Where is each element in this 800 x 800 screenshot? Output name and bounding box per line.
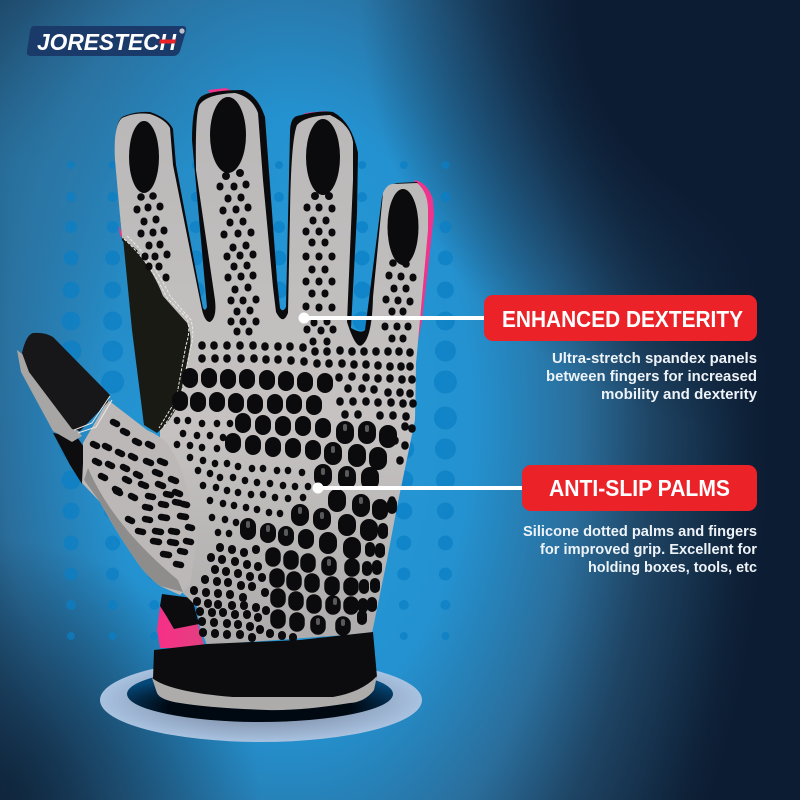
callout: anti-slip palms [522, 465, 757, 576]
cuff trim [152, 676, 377, 710]
thumb black underlay [53, 433, 88, 484]
black cuff gusset [160, 594, 199, 629]
thumb [17, 333, 197, 595]
halftone dot pattern [71, 165, 460, 636]
pink side panel [404, 180, 434, 362]
callout line: enhanced dexterity [298, 312, 486, 324]
thumb stitching [74, 396, 112, 433]
thumb dots [93, 422, 192, 565]
silver palm and fingers [115, 93, 428, 645]
callout line: anti-slip palms [312, 482, 524, 494]
pink cuff panel [157, 606, 205, 648]
glove [17, 88, 434, 710]
leather stitching [124, 236, 193, 428]
heading badge: ANTI-SLIP PALMS [549, 475, 730, 501]
description: Ultra-stretch spandex panels [552, 351, 757, 367]
pink fingertip trims [119, 88, 326, 238]
palm large dots [180, 376, 380, 541]
palm lower left dots [194, 547, 293, 638]
description: mobility and dexterity [601, 387, 758, 403]
description: holding boxes, tools, etc [588, 560, 757, 576]
podium base [100, 658, 422, 742]
thumb tip silver [17, 350, 82, 442]
description [523, 524, 757, 576]
finger silicone dots [137, 184, 413, 342]
black leather palm panel [123, 236, 193, 433]
description: for improved grip. Excellent for [540, 542, 757, 558]
thumb tip black mesh [22, 333, 110, 431]
black cuff [153, 632, 377, 697]
heading badge [484, 295, 757, 341]
thumb inner darker band [84, 468, 183, 592]
description: Silicone dotted palms and fingers [523, 524, 757, 540]
black finger backing [115, 90, 425, 420]
heading badge [522, 465, 757, 511]
description [546, 351, 758, 403]
logo: JORESTECH [37, 29, 177, 55]
callout: enhanced dexterity [484, 295, 758, 403]
big dot highlights [248, 426, 367, 624]
thumb silver palm [82, 400, 197, 595]
description: between fingers for increased [546, 369, 757, 385]
fingertip pads [129, 97, 418, 268]
heading badge: ENHANCED DEXTERITY [502, 306, 743, 332]
palm small dots [202, 345, 413, 501]
